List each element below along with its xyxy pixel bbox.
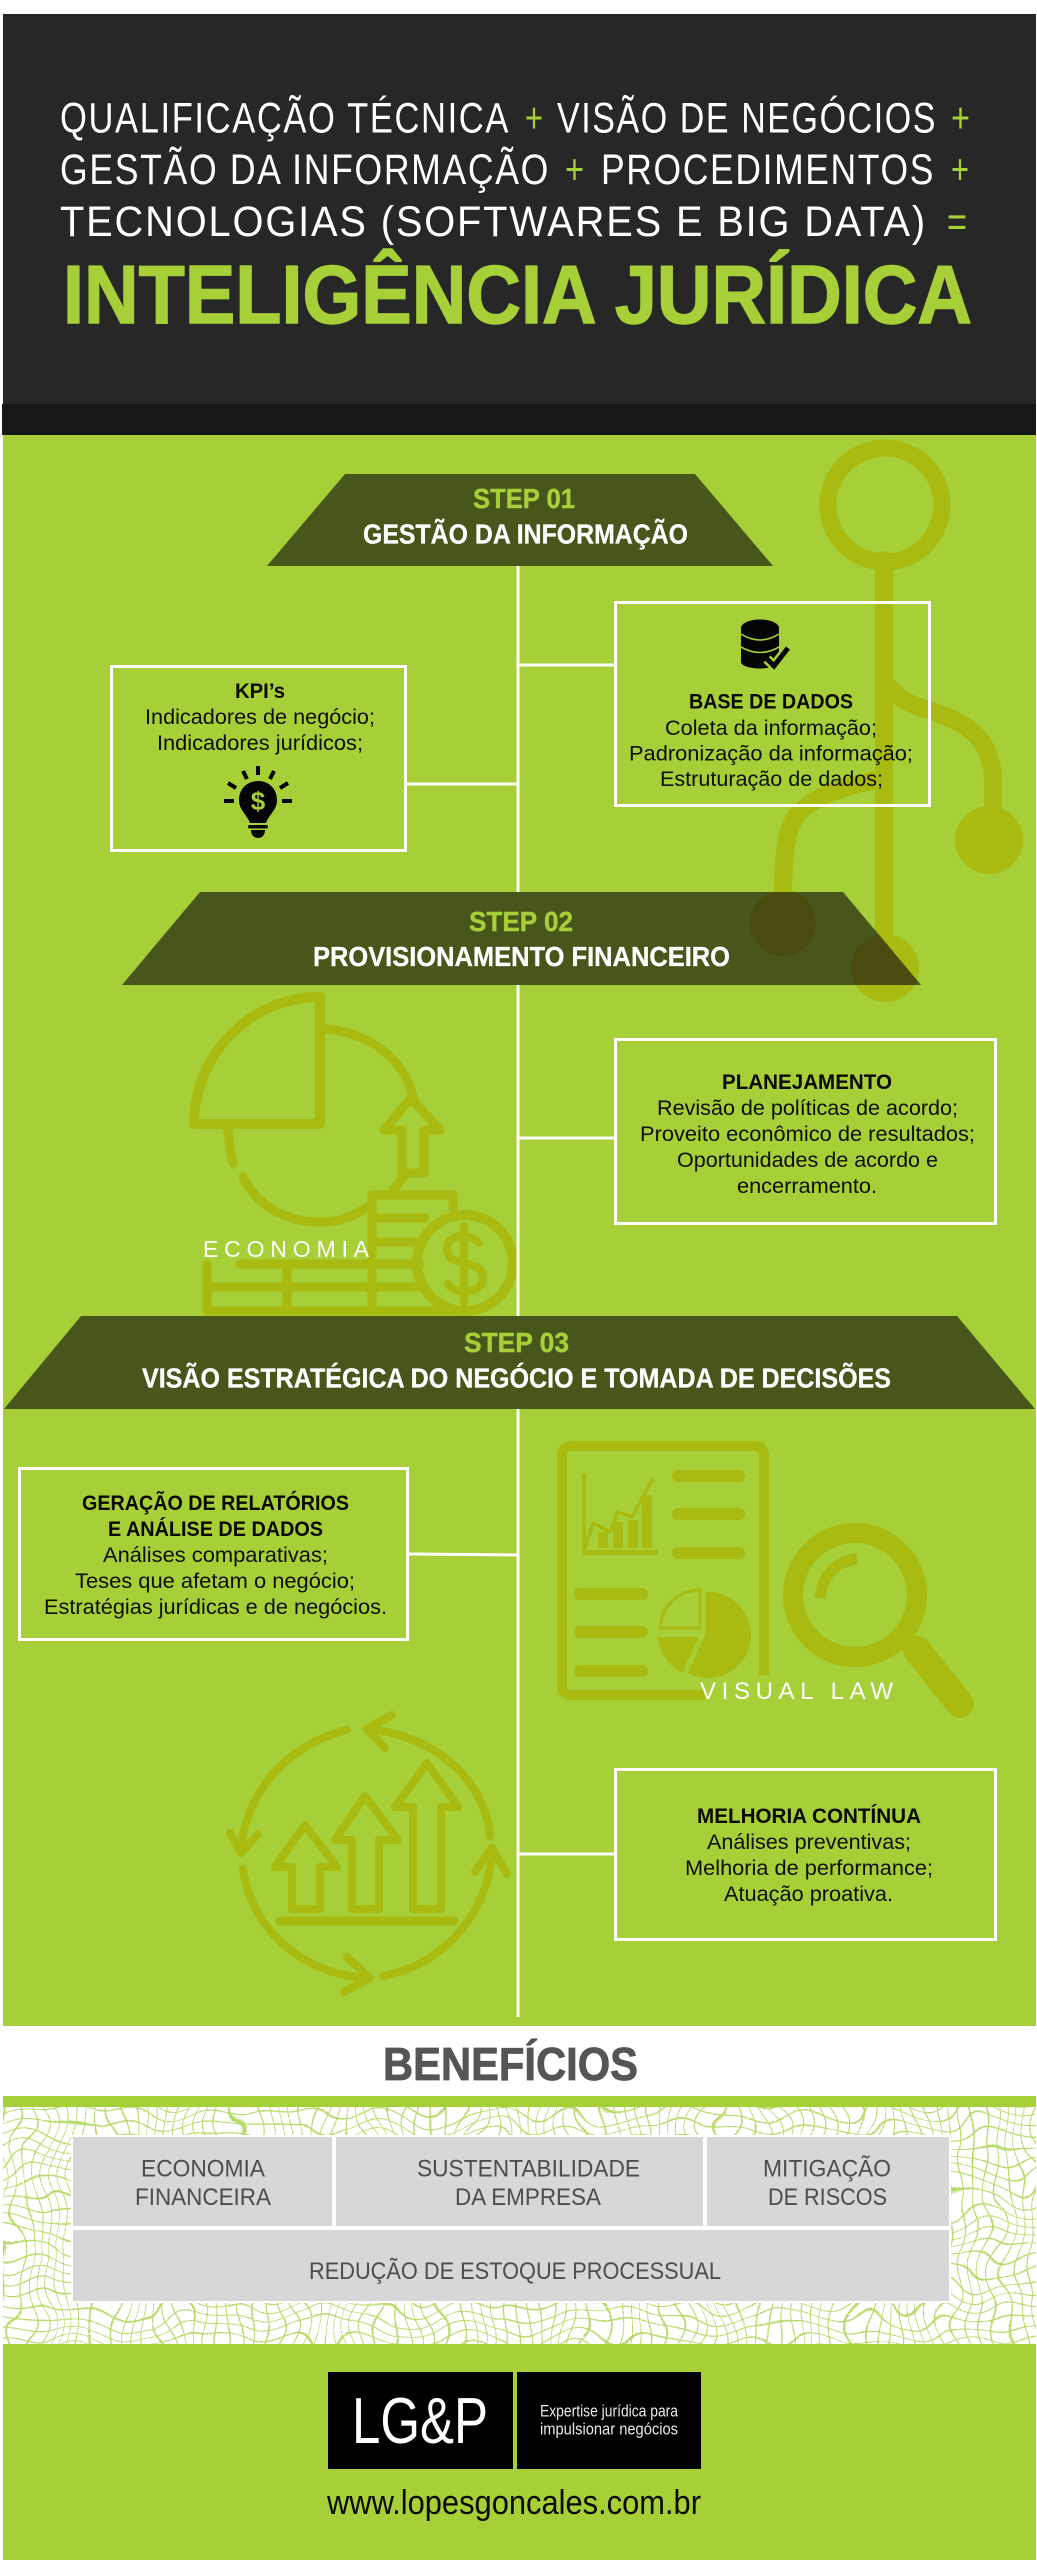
icon: light bulb with dollar: $ (251, 786, 266, 816)
panel: box melhoria contínua: MELHORIA CONTÍNUA (697, 1805, 921, 1828)
panel: box relatórios: Teses que afetam o negócio; (75, 1570, 355, 1593)
title: formula line 2: + (951, 146, 969, 194)
icon: report and magnifier background (562, 1446, 960, 1704)
panel: box planejamento: Proveito econômico de resultados; (640, 1123, 975, 1146)
panel: box base de dados: Estruturação de dados; (660, 768, 883, 791)
panel: box planejamento: Oportunidades de acordo e (677, 1149, 938, 1172)
panel: step 03 banner: VISÃO ESTRATÉGICA DO NEGÓCIO E TOMADA DE DECISÕES (142, 1362, 891, 1394)
benefit: mitigação de riscos: DE RISCOS (768, 2184, 887, 2211)
panel: box relatórios: Estratégias jurídicas e de negócios. (44, 1596, 387, 1619)
logo: LG&P: LG&P (352, 2384, 488, 2457)
panel: box KPIs: KPI’s (235, 680, 285, 703)
panel: box relatórios: GERAÇÃO DE RELATÓRIOS (82, 1491, 349, 1515)
background mesh pattern (3, 2107, 1036, 2344)
panel: header (2, 14, 1036, 435)
panel: box base de dados: Padronização da informação; (629, 742, 913, 766)
benefit: sustentabilidade da empresa: DA EMPRESA (455, 2184, 602, 2211)
timeline connector lines (407, 566, 614, 2017)
benefit: mitigação de riscos: MITIGAÇÃO (763, 2156, 891, 2182)
panel: box planejamento: PLANEJAMENTO (722, 1071, 892, 1094)
title: formula line 3: TECNOLOGIAS (SOFTWARES E BIG DATA) (60, 198, 927, 246)
panel: box relatórios: E ANÁLISE DE DADOS (108, 1518, 323, 1541)
panel: footer (3, 2344, 1036, 2560)
heading: benefícios: BENEFÍCIOS (383, 2038, 638, 2090)
panel: box KPIs: Indicadores jurídicos; (157, 732, 363, 755)
panel: box KPIs (112, 666, 406, 850)
logo: LG&P: Expertise jurídica para (540, 2402, 678, 2420)
website url: www.lopesgoncales.com.br (326, 2484, 701, 2522)
benefit: redução de estoque: REDUÇÃO DE ESTOQUE PROCESSUAL (309, 2258, 721, 2285)
circuit overlap seen through banner (750, 892, 917, 985)
title: formula line 3: = (947, 198, 967, 246)
panel: step 03 banner: STEP 03 (464, 1327, 569, 1358)
title: formula line 2: GESTÃO DA INFORMAÇÃO (60, 146, 550, 194)
icon: light bulb with dollar (224, 766, 292, 838)
panel: box planejamento: encerramento. (737, 1175, 877, 1198)
panel: box planejamento (616, 1040, 996, 1224)
panel: step 02 banner (122, 892, 921, 985)
panel: box relatórios (20, 1468, 408, 1640)
panel: box planejamento: Revisão de políticas de acordo; (657, 1097, 958, 1120)
panel: box melhoria contínua: Análises preventivas; (707, 1831, 911, 1854)
panel: box melhoria contínua (616, 1770, 996, 1940)
label: visual law: VISUAL LAW (700, 1678, 893, 1705)
title: formula line 1: QUALIFICAÇÃO TÉCNICA (60, 94, 510, 142)
icon: continuous improvement background (230, 1715, 507, 1992)
panel: benefits (3, 2096, 1036, 2344)
title: formula line 1: + (525, 94, 543, 142)
panel: step 01 banner (267, 474, 773, 566)
benefit: sustentabilidade da empresa (336, 2137, 703, 2226)
title: formula line 2: PROCEDIMENTOS (601, 146, 935, 194)
panel: step 02 banner: STEP 02 (469, 906, 573, 937)
panel: box base de dados: Coleta da informação; (665, 717, 877, 740)
benefit: sustentabilidade da empresa: SUSTENTABILIDADE (417, 2156, 640, 2182)
panel: box melhoria contínua: Atuação proativa. (724, 1883, 893, 1906)
title: formula line 2: + (565, 146, 584, 194)
benefit: redução de estoque (73, 2230, 949, 2301)
panel: box base de dados (616, 602, 930, 806)
mini line chart (582, 1474, 658, 1555)
title: formula line 2 (60, 146, 969, 194)
title: formula line 1: + (951, 94, 970, 142)
label: economia: ECONOMIA (203, 1236, 370, 1262)
panel: box base de dados: BASE DE DADOS (689, 690, 853, 714)
panel: green steps background (3, 435, 1036, 2026)
benefit: economia financeira: ECONOMIA (141, 2156, 266, 2182)
mini pie chart (658, 1590, 751, 1678)
panel: box melhoria contínua: Melhoria de performance; (685, 1857, 933, 1880)
panel: box KPIs: Indicadores de negócio; (145, 706, 375, 729)
panel: step 01 banner: GESTÃO DA INFORMAÇÃO (363, 518, 688, 550)
panel: box relatórios: Análises comparativas; (103, 1544, 328, 1567)
panel: step 01 banner: STEP 01 (473, 483, 575, 514)
title: main heading: INTELIGÊNCIA JURÍDICA (63, 248, 972, 341)
icon: database with check (741, 620, 788, 668)
logo: LG&P (328, 2372, 701, 2469)
icon: circuit background (750, 448, 1023, 1002)
benefit: economia financeira (73, 2137, 332, 2226)
panel: step 02 banner: PROVISIONAMENTO FINANCEIRO (313, 941, 730, 972)
benefit: economia financeira: FINANCEIRA (135, 2184, 272, 2211)
benefit: mitigação de riscos (707, 2137, 949, 2226)
panel: step 03 banner (4, 1316, 1035, 1409)
title: formula line 1: VISÃO DE NEGÓCIOS (557, 94, 937, 142)
logo: LG&P: impulsionar negócios (540, 2420, 678, 2438)
title: formula line 1 (60, 94, 970, 142)
icon: economy background (194, 997, 513, 1311)
